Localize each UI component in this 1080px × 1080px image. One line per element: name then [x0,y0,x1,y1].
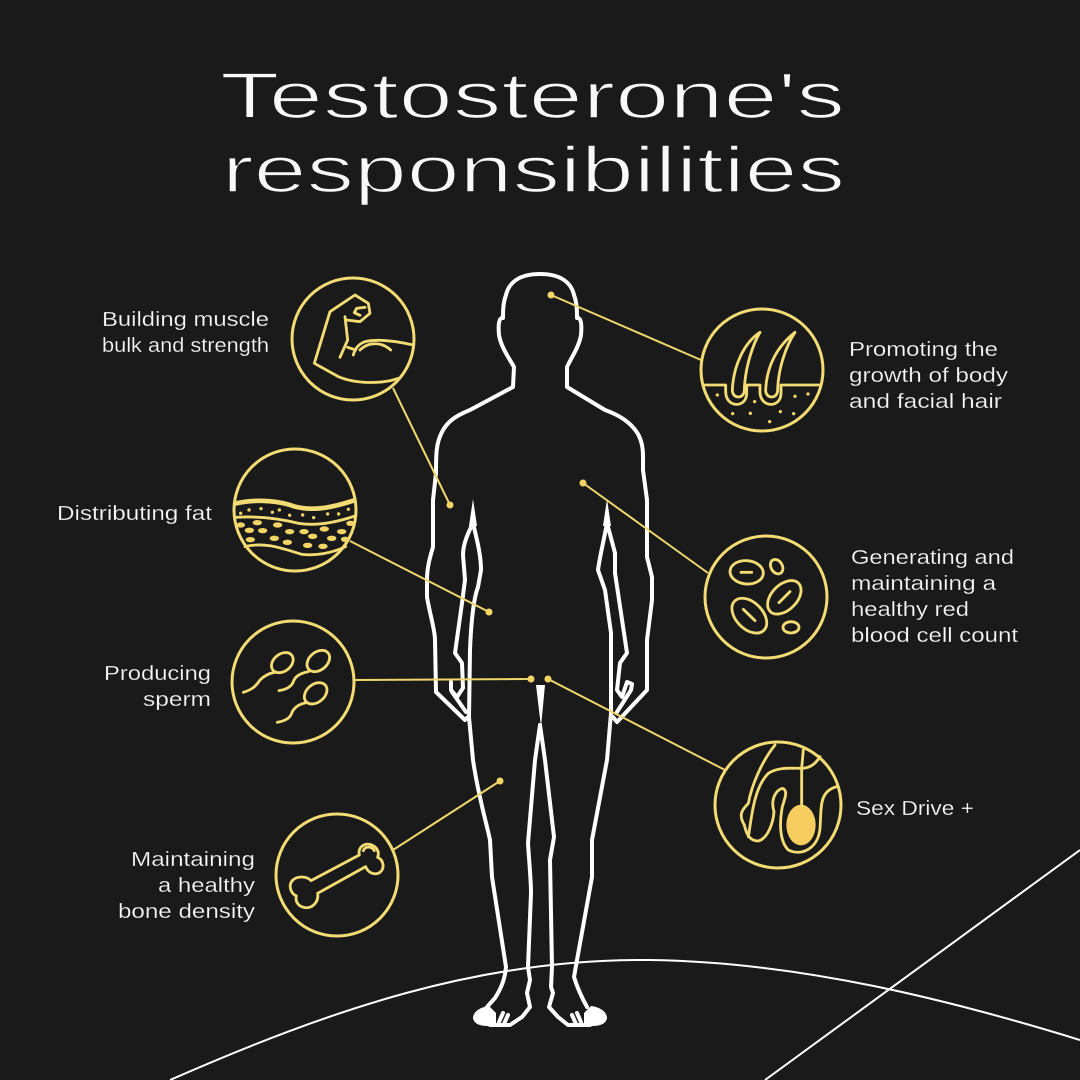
label: building muscle: Building muscle [102,309,269,331]
connector: hair [548,292,701,360]
icon: male anatomy [715,742,841,868]
title [220,59,845,206]
connector: bone [393,778,504,850]
label: hair growth: growth of body [849,365,1008,387]
connector: muscle [393,388,454,508]
label: producing sperm [104,663,211,711]
label: bone density [118,849,255,923]
label: hair growth [849,339,1008,413]
title: responsibilities [222,133,845,206]
title: Testosterone's [220,59,845,132]
icon: red blood cells [705,536,827,658]
icon: flexed muscle [292,278,414,400]
icon: bone [276,814,398,936]
label: red blood cells: healthy red [851,599,969,621]
connector: sex drive [544,676,725,770]
icon: fat layers [234,449,356,571]
human body outline [427,274,652,1026]
label: producing sperm: Producing [104,663,211,685]
label: sex drive: Sex Drive + [856,798,974,820]
connector: sperm [355,676,534,682]
label: hair growth: and facial hair [849,391,1002,413]
connector: fat [350,541,492,616]
label: red blood cells: Generating and [851,547,1014,569]
label: building muscle: bulk and strength [102,335,269,357]
ground lines [170,850,1080,1080]
icon: hair follicles [701,309,823,431]
label: producing sperm: sperm [143,689,211,711]
label: red blood cells [851,547,1019,647]
icon: sperm [232,621,354,743]
connector: blood [580,480,708,573]
label: hair growth: Promoting the [849,339,998,361]
label: distributing fat: Distributing fat [57,503,213,525]
label: building muscle [102,309,269,357]
label: bone density: a healthy [158,875,255,897]
label: bone density: Maintaining [131,849,255,871]
label: red blood cells: blood cell count [851,625,1019,647]
label: bone density: bone density [118,901,255,923]
label: red blood cells: maintaining a [851,573,997,595]
